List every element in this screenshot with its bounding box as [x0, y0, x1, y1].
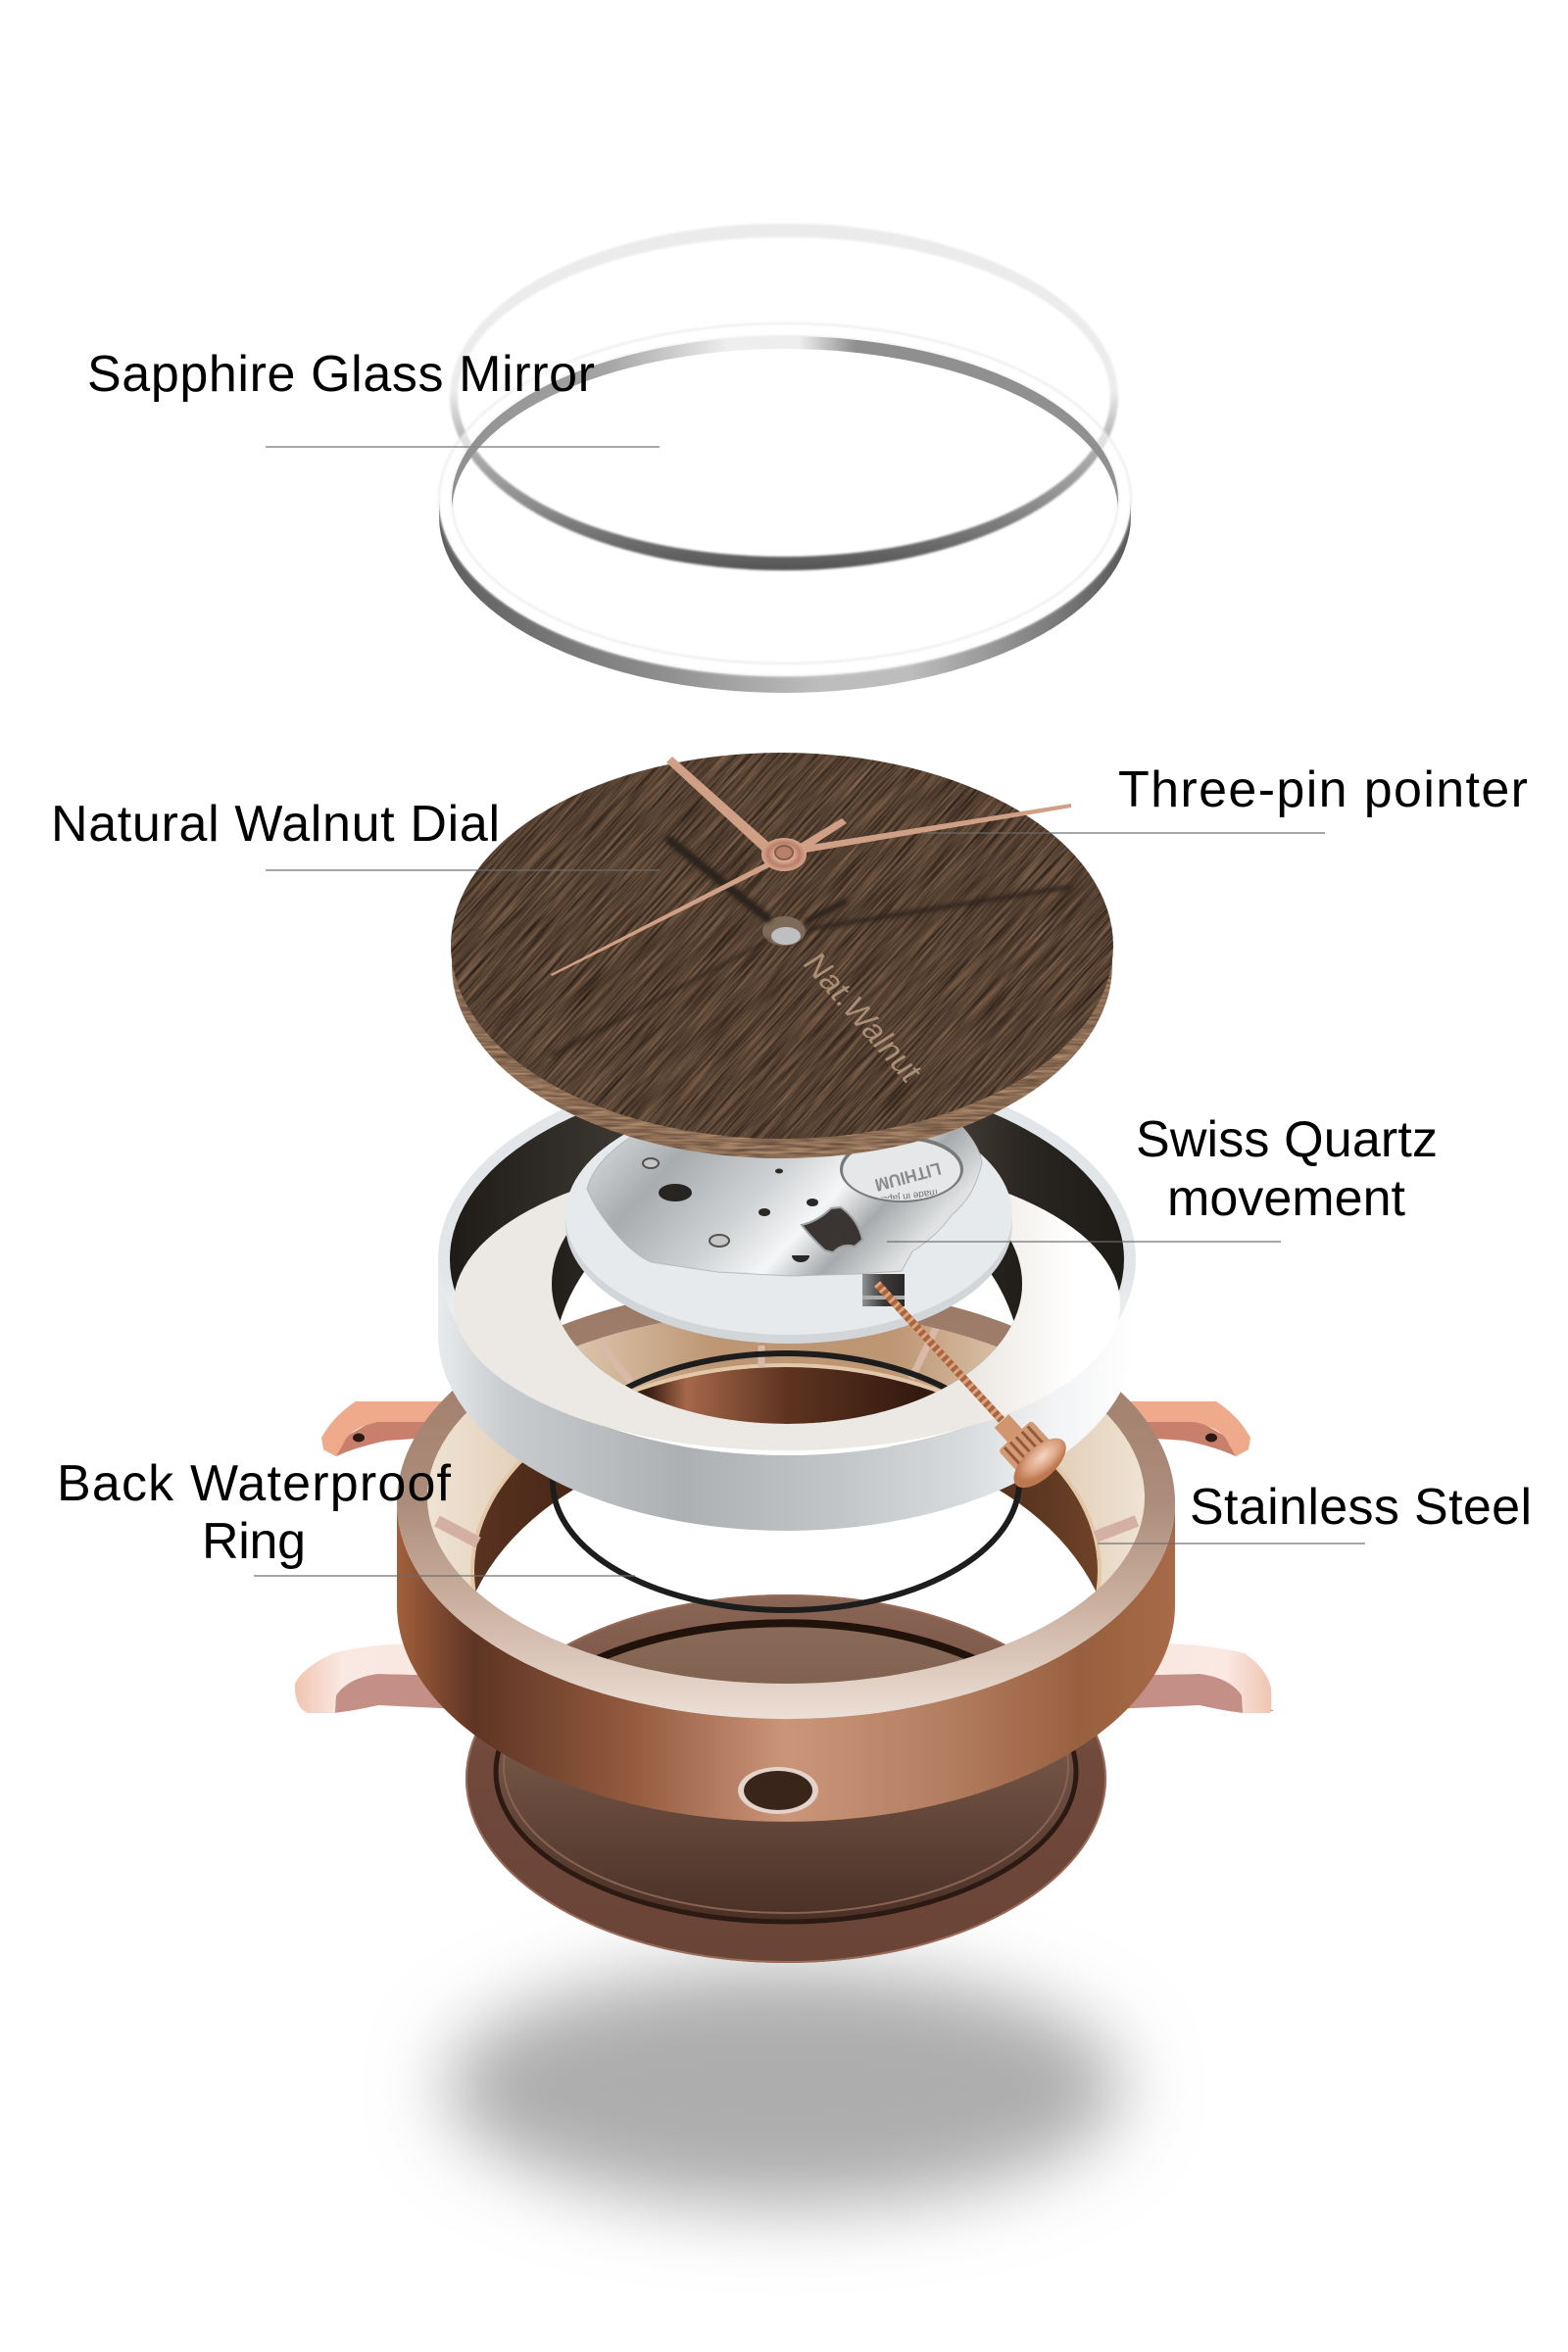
crown hole [738, 1767, 818, 1814]
dark inner wall [450, 1075, 1124, 1444]
cream ledge [454, 1144, 1120, 1450]
glass outer wall [439, 500, 1131, 693]
label: back waterproof ring: Back Waterproof [57, 1455, 452, 1512]
top face [295, 1643, 453, 1713]
label: back waterproof ring: Ring [202, 1513, 306, 1570]
stainless steel case back wall [427, 1323, 1145, 1682]
rim [438, 1063, 1136, 1455]
stem twist [877, 1284, 1002, 1420]
battery: LITHIUM [873, 1158, 944, 1196]
Nat.Walnut logo: Nat.Walnut [795, 948, 930, 1088]
sapphire glass lower ring [431, 323, 1139, 693]
drop shadow under the watch [446, 1968, 1122, 2207]
top face [1119, 1643, 1271, 1713]
rose gold lugs upper right [1129, 1401, 1250, 1456]
underside [1111, 1674, 1274, 1713]
crown [978, 1399, 1074, 1496]
side spoke left [437, 1521, 478, 1543]
outer wall [438, 1259, 1136, 1531]
underside [304, 1674, 461, 1713]
label: stainless steel: Stainless Steel [1190, 1479, 1532, 1536]
underside [1129, 1422, 1249, 1456]
rose gold lug lower left [295, 1643, 461, 1713]
label: swiss quartz movement: Swiss Quartz [1136, 1111, 1438, 1168]
rose gold lug lower right [1111, 1643, 1274, 1713]
glass inner wall [452, 337, 1118, 508]
plate inner dish [496, 1622, 1076, 1922]
plate outer highlight [466, 1595, 1105, 1962]
inner lip [470, 1363, 1102, 1591]
label: three-pin pointer: Three-pin pointer [1118, 761, 1528, 818]
hand shadows [552, 840, 1069, 1055]
stem [877, 1284, 1002, 1420]
stem slot [862, 1274, 905, 1306]
dark brown interior wall [474, 1367, 1098, 1684]
white movement holder [438, 1107, 1136, 1531]
rose gold lugs upper left [321, 1401, 443, 1456]
label: sapphire glass mirror: Sapphire Glass Mirror [87, 346, 595, 403]
center hole [762, 916, 806, 946]
natural walnut dial [451, 753, 1113, 1158]
label: natural walnut dial: Natural Walnut Dial [51, 796, 500, 853]
irregular gear opening [802, 1207, 862, 1252]
groove upper shadow arc [593, 1623, 979, 1661]
crown stem [877, 1284, 1074, 1496]
pin hole [353, 1433, 365, 1443]
cream inner wall [427, 1323, 1145, 1590]
back plate [466, 1594, 1106, 1963]
metal plate [587, 1107, 982, 1276]
back waterproof ring [553, 1353, 1019, 1610]
glass top face [439, 323, 1131, 676]
plate rim [466, 1594, 1106, 1963]
pin hole [1205, 1433, 1217, 1443]
side spoke right [1096, 1521, 1137, 1537]
label: swiss quartz movement: movement [1167, 1170, 1406, 1227]
three-pin pointer hands [551, 757, 1071, 976]
spokes [594, 1327, 939, 1384]
battery [840, 1136, 963, 1205]
Swiss quartz movement [565, 1127, 1012, 1344]
small holes [759, 1168, 818, 1262]
underside [323, 1422, 443, 1456]
plate groove shadow [496, 1622, 1076, 1922]
label: back waterproof ring [57, 1455, 635, 1576]
dial wood face [451, 753, 1113, 1139]
sapphire glass upper ring [450, 223, 1118, 570]
top face ring [397, 1286, 1175, 1719]
front wall [397, 1502, 1175, 1822]
stainless steel case front [397, 1286, 1175, 1822]
screw lower [710, 1235, 729, 1247]
dark crescent inside the hole [552, 1235, 1022, 1321]
plate groove highlight [504, 1619, 1068, 1913]
arbor hole [659, 1184, 692, 1201]
disc face [565, 1096, 1012, 1335]
screw left [643, 1158, 659, 1168]
top face [321, 1401, 443, 1456]
disc wall [565, 1104, 1012, 1344]
battery: made in japan [875, 1187, 938, 1205]
label: swiss quartz movement [887, 1111, 1438, 1242]
dial side edge [452, 960, 1112, 1158]
top face [1129, 1401, 1250, 1456]
